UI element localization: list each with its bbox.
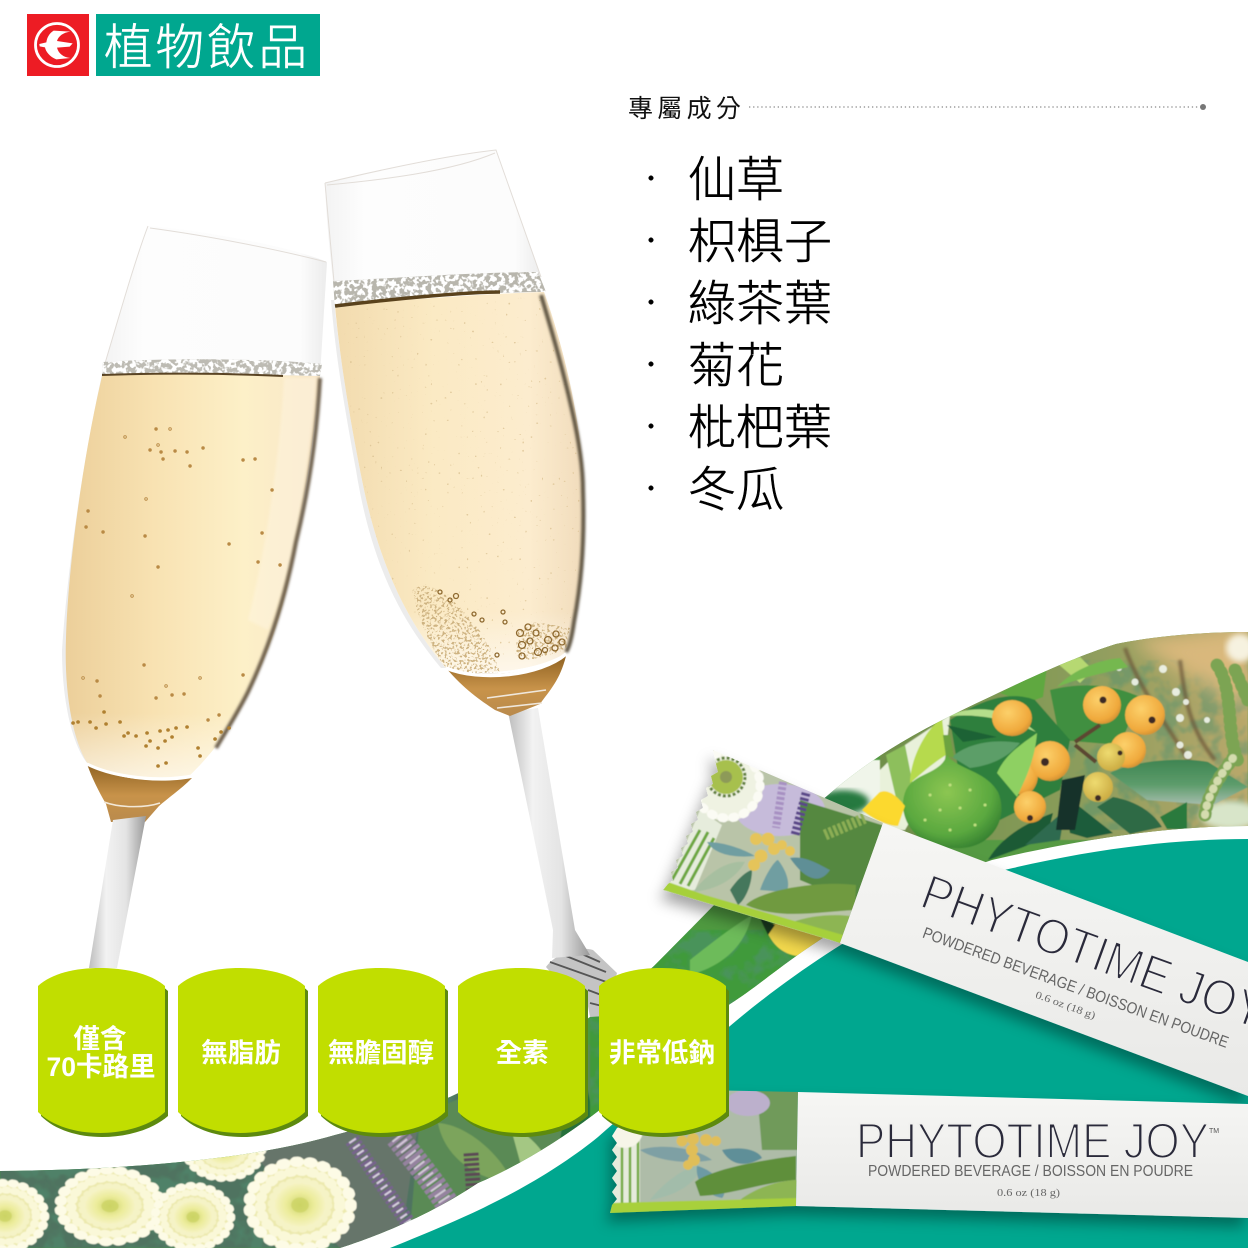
stem <box>89 816 146 968</box>
liquid <box>335 292 583 672</box>
amber base <box>87 764 192 822</box>
badge: vegan: 全素 <box>496 1038 548 1068</box>
foot <box>546 949 617 1017</box>
ingredient: raisin tree seed: 枳椇子 <box>688 216 832 269</box>
icon: chrysanthemum flowers <box>0 1150 358 1248</box>
sachet text: PHYTOTIME JOY <box>856 1113 1209 1169</box>
foam <box>102 359 322 376</box>
foam <box>333 272 546 308</box>
bubbles <box>73 429 280 766</box>
ingredients list <box>649 154 832 517</box>
product sachet: lower <box>600 1085 1248 1218</box>
outer glass wall <box>331 300 446 668</box>
badge: very low sodium <box>599 968 729 1137</box>
ingredients heading with dotted leader <box>628 95 1206 123</box>
glass upper bowl <box>325 150 541 290</box>
champagne glass: left <box>62 226 327 968</box>
badge: no cholesterol: 無膽固醇 <box>328 1038 434 1068</box>
product sachet: upper <box>650 745 1248 1096</box>
sachet white label <box>796 1092 1248 1218</box>
icon: loquat fruits <box>992 686 1165 823</box>
badge: 70 calories <box>38 968 168 1137</box>
badge: vegan <box>458 968 588 1137</box>
glass upper bowl <box>103 226 327 376</box>
dense bubble clusters <box>412 586 570 673</box>
ingredient: winter melon: 冬瓜 <box>688 464 784 517</box>
badge: no fat: 無脂肪 <box>201 1038 281 1068</box>
sachet text: 0.6 oz (18 g) <box>997 1188 1061 1199</box>
fine bubbles <box>344 295 583 660</box>
stem <box>508 708 590 958</box>
sachet text <box>856 1113 1219 1199</box>
badge: no cholesterol <box>318 968 448 1137</box>
teal background curve <box>390 839 1248 1248</box>
sachet text: 0.6 oz (18 g) <box>1034 990 1097 1022</box>
sachet text: POWDERED BEVERAGE / BOISSON EN POUDRE <box>868 1163 1193 1180</box>
header title: plant drinks: 植物飲品 <box>104 21 310 75</box>
green foliage behind sachets <box>590 760 900 1130</box>
loquat and gourd photo <box>862 628 1248 860</box>
sachet artwork <box>600 1085 800 1215</box>
sachet text: TM <box>1209 1128 1219 1135</box>
badge row <box>38 968 729 1137</box>
sachet artwork <box>656 750 883 957</box>
sachet white label <box>840 823 1248 1096</box>
ingredient: immortal grass: 仙草 <box>688 154 784 207</box>
champagne glass: right <box>325 150 617 1017</box>
header logo: red swallow mark <box>27 14 89 76</box>
glass dark edge <box>541 295 583 652</box>
outer glass wall <box>62 370 108 764</box>
amber base <box>446 656 566 716</box>
highlight band <box>248 378 316 630</box>
ingredient: green tea leaf: 綠茶葉 <box>688 278 832 331</box>
badge: very low sodium: 非常低鈉 <box>609 1038 715 1068</box>
liquid <box>66 372 320 778</box>
photo swoosh band <box>0 620 1248 1248</box>
ingredient: loquat leaf: 枇杷葉 <box>688 402 832 455</box>
icon: winter gourd <box>943 735 954 757</box>
ingredient: chrysanthemum: 菊花 <box>688 340 784 393</box>
badge: no fat <box>178 968 308 1137</box>
badge: 70 calories: 70卡路里 <box>47 1052 155 1082</box>
ingredients heading with dotted leader: 專屬成分 <box>628 95 745 123</box>
badge: 70 calories: 僅含 <box>74 1024 127 1054</box>
chrysanthemum meadow photo <box>0 1040 600 1248</box>
glass dark edge <box>216 378 320 748</box>
